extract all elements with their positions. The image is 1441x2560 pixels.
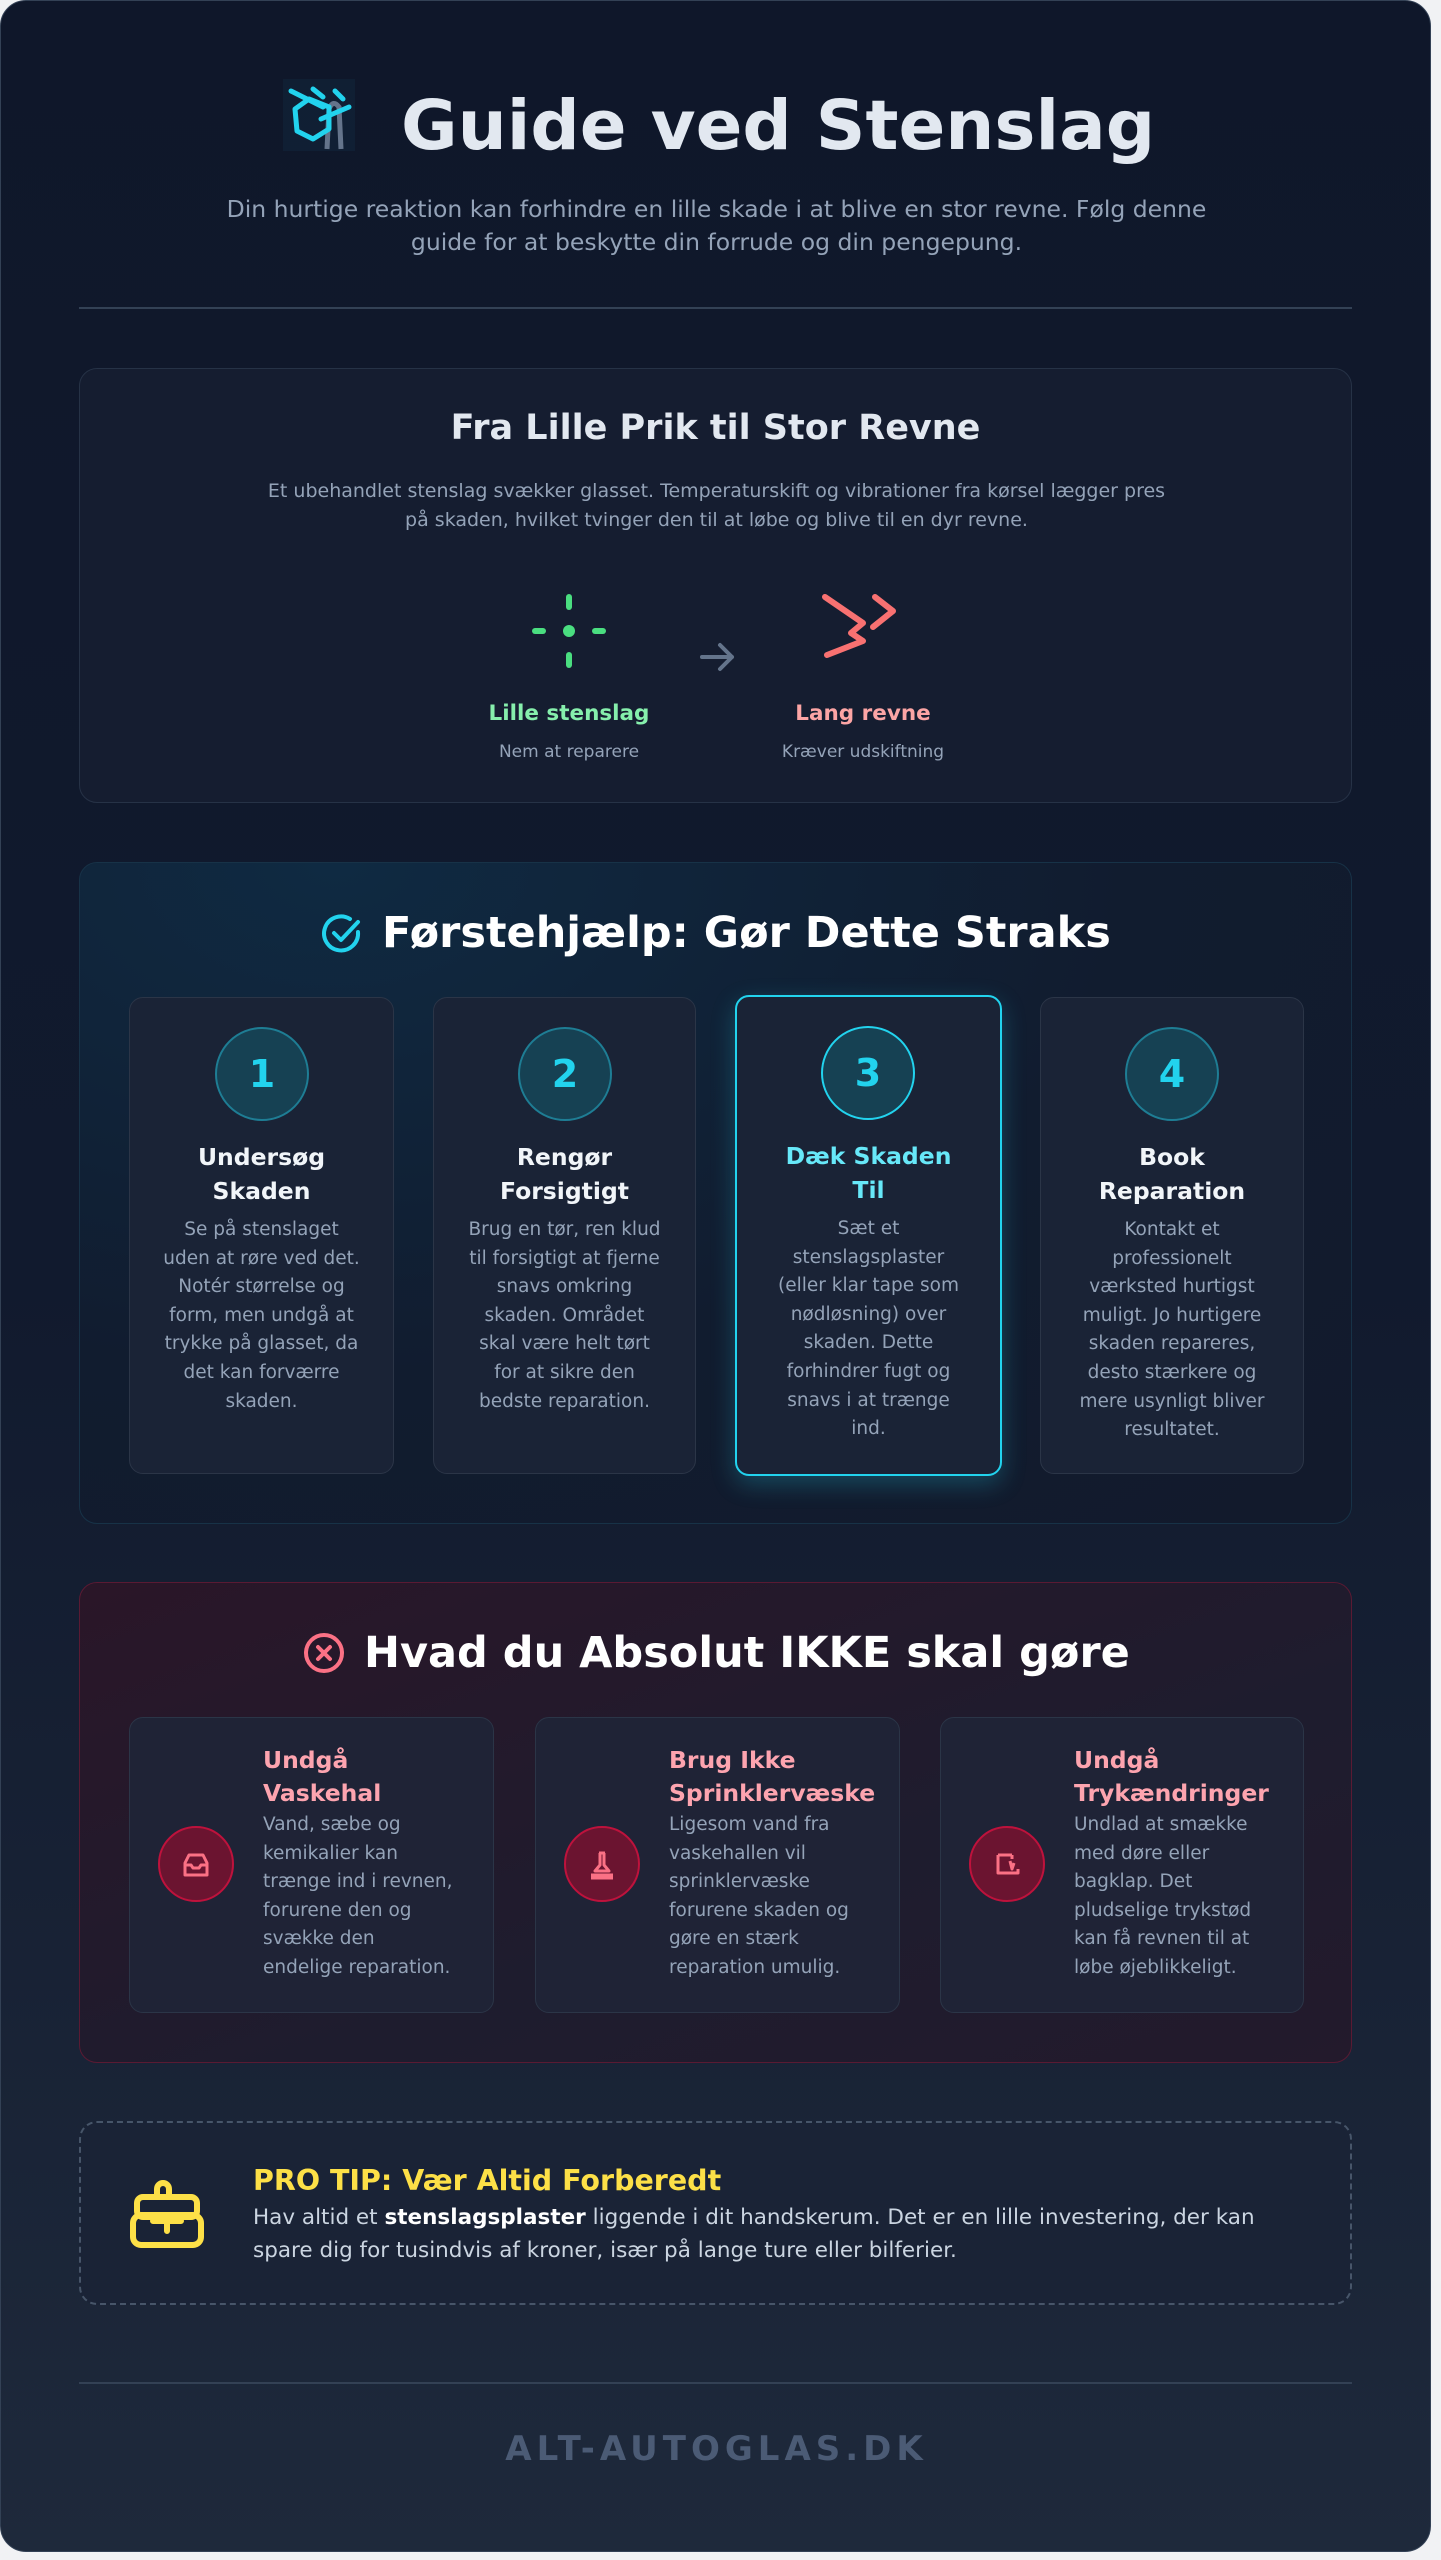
label: long crack [782,701,944,762]
card: pressure: Undgå [1074,1746,1159,1774]
icon: car wash [158,1826,234,1902]
card: car wash: Vand, sæbe og kemikalier kan trænge ind i revnen, forurene den og svække den [263,1814,453,1949]
card: pressure [940,1717,1304,2013]
step 2: Brug en tør, ren klud til forsigtigt at fjerne snavs omkring skaden. Området skal være helt tørt for at sikre den bedste reparation. [468,1219,661,1412]
paragraph: på skaden, hvilket tvinger den til at løbe og blive til en dyr revne. [405,509,1028,531]
label: long crack: Kræver udskiftning [782,742,944,762]
panel: from small to big crack [79,368,1352,803]
label: small chip [489,701,649,762]
icon: long crack [822,594,896,658]
step 4: Book [1139,1143,1205,1171]
subtitle: guide for at beskytte din forrude og din pengepung. [411,228,1022,256]
step 1: 1 [249,1052,275,1096]
heading: Førstehjælp: Gør Dette Straks [382,908,1111,958]
arrow [700,642,734,671]
subtitle [227,195,1206,256]
step 3 highlighted: Dæk Skaden [786,1142,951,1170]
paragraph [268,480,1165,531]
pro tip callout [79,2121,1352,2305]
step 3 highlighted: 3 [855,1051,881,1095]
step 2: Rengør [517,1143,612,1171]
card: washer fluid [535,1717,900,2013]
title: Guide ved Stenslag [401,86,1155,166]
step 4: 4 [1159,1052,1185,1096]
step 2: Forsigtigt [500,1177,629,1205]
step 2 [433,997,696,1474]
card: car wash: Vaskehal [263,1779,381,1807]
icon: small chip [532,594,606,668]
heading: Hvad du Absolut IKKE skal gøre [364,1628,1130,1678]
label: long crack: Lang revne [795,701,931,726]
step 1: Skaden [213,1177,310,1205]
step 3 highlighted: Sæt et stenslagsplaster (eller klar tape som nødløsning) over skaden. Dette forhindrer fugt og snavs i at trænge ind. [778,1218,959,1439]
card: washer fluid: Sprinklervæske [669,1779,875,1807]
panel: do not [79,1582,1352,2063]
label: small chip: Lille stenslag [489,701,649,726]
step 4: Kontakt et professionelt værksted hurtigst muligt. Jo hurtigere skaden repareres, desto stærkere og mere usynligt bliver resultatet. [1079,1219,1265,1440]
card: washer fluid: Brug Ikke [669,1746,796,1774]
icon: toolbox [130,2180,204,2248]
card: car wash: endelige reparation. [263,1956,450,1978]
pro tip callout: PRO TIP: Vær Altid Forberedt [253,2164,721,2197]
card: car wash: Undgå [263,1746,348,1774]
panel: first aid [79,862,1352,1524]
label: small chip: Nem at reparere [499,742,639,762]
card: car wash [129,1717,494,2013]
icon: fluid [564,1826,640,1902]
step 3 highlighted: Til [852,1176,885,1204]
step 1 [129,997,394,1474]
subtitle: Din hurtige reaktion kan forhindre en lille skade i at blive en stor revne. Følg denne [227,195,1206,223]
card: pressure: Undlad at smække med døre eller bagklap. Det pludselige trykstød kan få revnen til at løbe øjeblikkeligt. [1074,1814,1251,1978]
paragraph: Et ubehandlet stenslag svækker glasset. Temperaturskift og vibrationer fra kørsel lægger pres [268,480,1165,502]
icon: check circle [322,914,360,952]
card: washer fluid: Ligesom vand fra vaskehallen vil sprinklervæske forurene skaden og gøre en stærk reparation umulig. [669,1814,849,1978]
step 2: 2 [552,1052,578,1096]
step 4 [1040,997,1304,1474]
step 4: Reparation [1099,1177,1245,1205]
header icon [283,79,355,151]
heading: Fra Lille Prik til Stor Revne [451,408,980,448]
card: pressure: Trykændringer [1074,1779,1269,1807]
pro tip callout: Hav altid et stenslagsplaster liggende i dit handskerum. Det er en lille investering, der kan spare dig for tusindvis af kroner, især på lange ture eller bilferier. [253,2205,1255,2263]
step 3 highlighted [735,995,1002,1476]
step 1: Se på stenslaget uden at røre ved det. Notér størrelse og form, men undgå at trykke på glasset, da det kan forværre skaden. [163,1219,360,1412]
icon: x circle [304,1633,344,1673]
step 1: Undersøg [198,1143,325,1171]
footer brand: ALT-AUTOGLAS.DK [505,2429,928,2469]
icon: door [969,1826,1045,1902]
